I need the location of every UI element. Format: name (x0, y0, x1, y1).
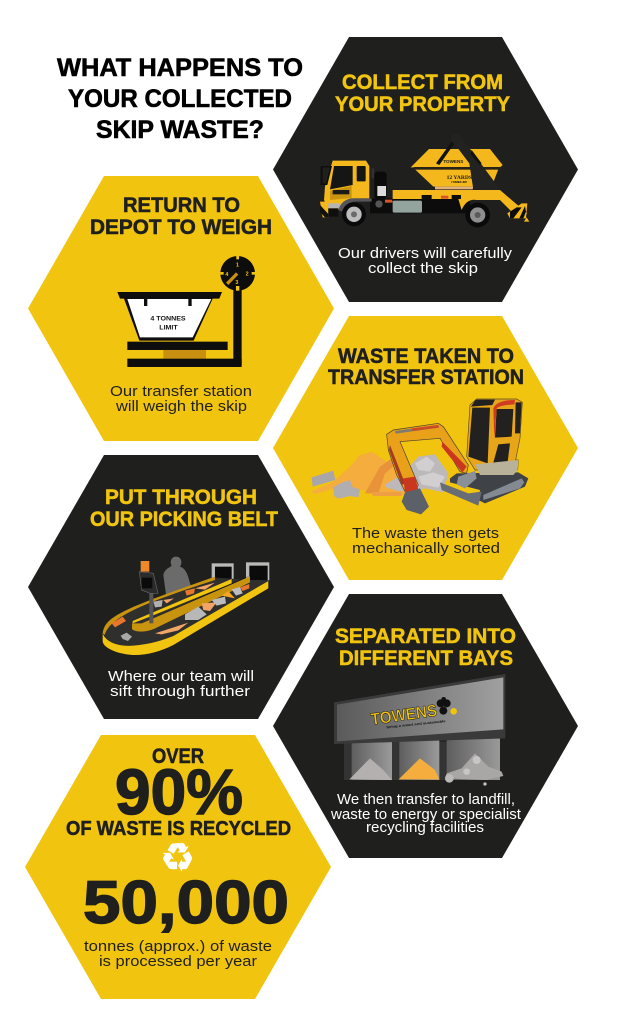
title (57, 54, 303, 144)
panel: return to depot to weigh (28, 176, 334, 441)
text: picking description: sift through further (110, 683, 250, 700)
text: picking description (108, 668, 254, 700)
text: tonnes description: tonnes (approx.) of waste (84, 938, 272, 955)
panel: waste taken to transfer station (273, 316, 578, 580)
heading: picking belt (90, 485, 278, 531)
icon: conveyor belt (103, 557, 269, 655)
heading: collect: YOUR PROPERTY (335, 92, 510, 116)
heading: transfer station: WASTE TAKEN TO (338, 344, 514, 368)
icon: excavator (385, 399, 528, 514)
heading: picking belt: PUT THROUGH (105, 485, 257, 509)
text: weigh description: Our transfer station (110, 383, 252, 400)
icon: sand pile and blocks (312, 452, 410, 499)
icon: weighing scale: 4 TONNES (150, 316, 186, 323)
title: SKIP WASTE? (96, 116, 264, 144)
panel: put through our picking belt (28, 455, 334, 719)
title: YOUR COLLECTED (68, 85, 292, 113)
text: over: OVER (152, 744, 204, 768)
icon: storage bays with TOWENS sign (334, 674, 505, 786)
text: collect description (338, 245, 513, 277)
heading: collect: COLLECT FROM (342, 70, 503, 94)
text: weigh description: will weigh the skip (115, 398, 247, 415)
panel: separated into different bays (273, 594, 578, 858)
heading: collect (335, 70, 510, 116)
text: bays description: We then transfer to landfill, (337, 791, 515, 808)
icon: recycle symbol: ♻ (160, 836, 195, 881)
stat: 90%: 90% (115, 756, 243, 828)
title: WHAT HAPPENS TO (57, 54, 303, 82)
icon: weighing scale (117, 256, 255, 367)
text: of waste is recycled: OF WASTE IS RECYCLED (66, 818, 291, 840)
stat: 50,000: 50,000 (83, 869, 289, 936)
icon: skip truck: 12 YARDS (447, 176, 472, 181)
heading: bays: SEPARATED INTO (335, 624, 516, 648)
icon: skip truck (320, 134, 529, 227)
heading: return: RETURN TO (123, 193, 240, 217)
heading: picking belt: OUR PICKING BELT (90, 507, 278, 531)
text: weigh description (110, 383, 252, 415)
text: sorted description: mechanically sorted (352, 540, 500, 557)
text: bays description: waste to energy or specialist (330, 806, 522, 823)
panel: recycling statistics (25, 735, 331, 999)
text: sorted description (352, 525, 500, 557)
heading: transfer station: TRANSFER STATION (328, 365, 524, 389)
icon: skip truck: TOWENS (443, 159, 464, 165)
text: bays description: recycling facilities (366, 819, 484, 836)
icon: weighing scale: 1 (236, 263, 239, 269)
icon: storage bays with TOWENS sign: TOWENS (370, 701, 438, 729)
heading: return: DEPOT TO WEIGH (90, 215, 272, 239)
heading: bays: DIFFERENT BAYS (339, 646, 513, 670)
panel: collect from your property (273, 37, 578, 302)
text: picking description: Where our team will (108, 668, 254, 685)
heading: return (90, 193, 272, 239)
icon: weighing scale: 2 (246, 271, 249, 277)
text: collect description: Our drivers will carefully (338, 245, 513, 262)
icon: weighing scale: 4 (225, 272, 228, 278)
text: tonnes description: is processed per year (99, 953, 257, 970)
heading: transfer station (328, 344, 524, 389)
text: bays description (330, 791, 522, 836)
icon: skip truck: 4 TONNES LIMIT (451, 181, 468, 184)
icon: weighing scale: 3 (235, 280, 238, 286)
icon: storage bays with TOWENS sign: being a smart and sustainable (386, 719, 446, 729)
text: sorted description: The waste then gets (352, 525, 499, 542)
text: tonnes description (84, 938, 272, 970)
text: collect description: collect the skip (368, 260, 478, 277)
icon: weighing scale: LIMIT (159, 324, 178, 331)
heading: bays (335, 624, 516, 670)
